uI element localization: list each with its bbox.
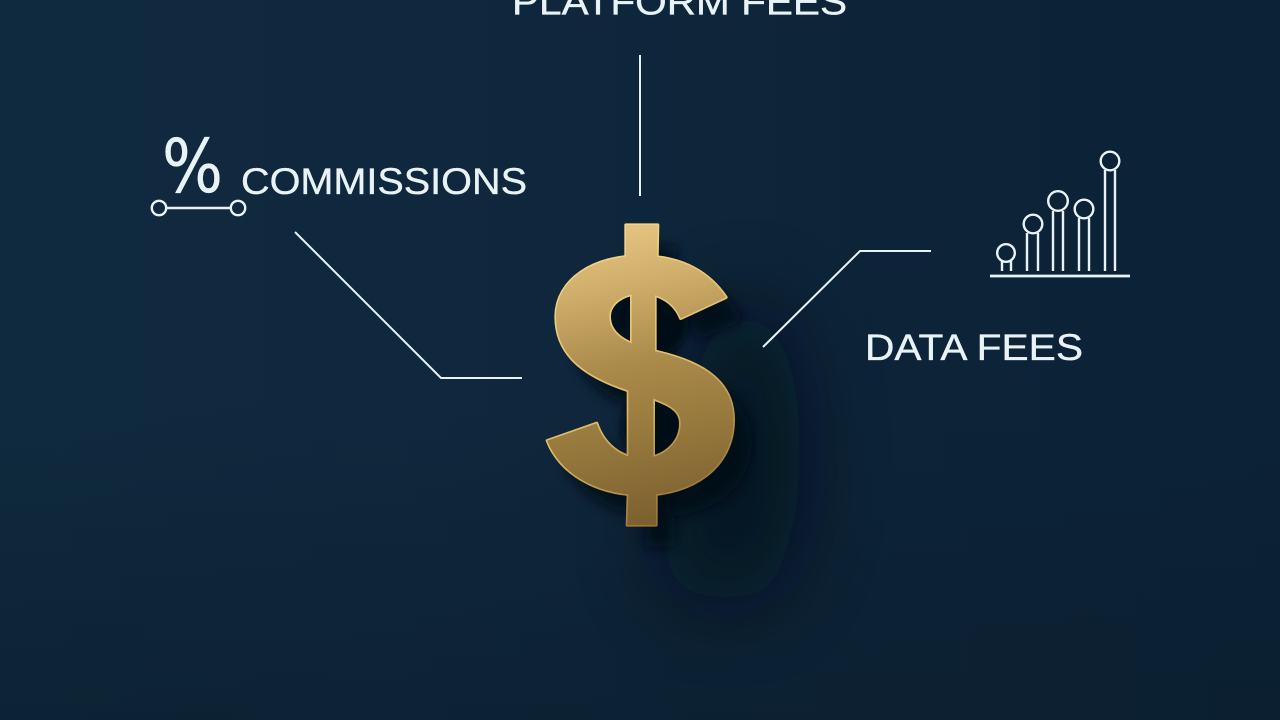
heading: commissions: COMMISSIONS bbox=[241, 161, 527, 202]
gold rim bbox=[547, 225, 733, 525]
bar 4 bbox=[1079, 218, 1089, 271]
dollar sign bbox=[547, 225, 752, 547]
heading: data fees: DATA FEES bbox=[865, 327, 1083, 368]
bar 5 bbox=[1105, 170, 1115, 271]
marker 5 bbox=[1101, 152, 1119, 170]
marker 4 bbox=[1075, 200, 1093, 218]
connector: platform fees bbox=[639, 55, 641, 196]
icon: percent with connected nodes: % bbox=[162, 124, 223, 210]
gold face bbox=[547, 225, 733, 525]
marker 1 bbox=[997, 244, 1015, 262]
bar 2 bbox=[1027, 233, 1038, 271]
bar 1 bbox=[1002, 261, 1011, 271]
connector: data fees bbox=[763, 251, 931, 347]
connector: commissions bbox=[295, 232, 522, 378]
bar 3 bbox=[1053, 211, 1063, 271]
marker 2 bbox=[1024, 215, 1042, 233]
chart baseline bbox=[990, 275, 1130, 277]
counter shading bbox=[622, 288, 688, 462]
marker 3 bbox=[1048, 191, 1068, 211]
icon: lollipop bar chart bbox=[990, 152, 1130, 276]
large soft shadow bbox=[660, 300, 800, 600]
dollar cast shadow bbox=[566, 247, 752, 547]
